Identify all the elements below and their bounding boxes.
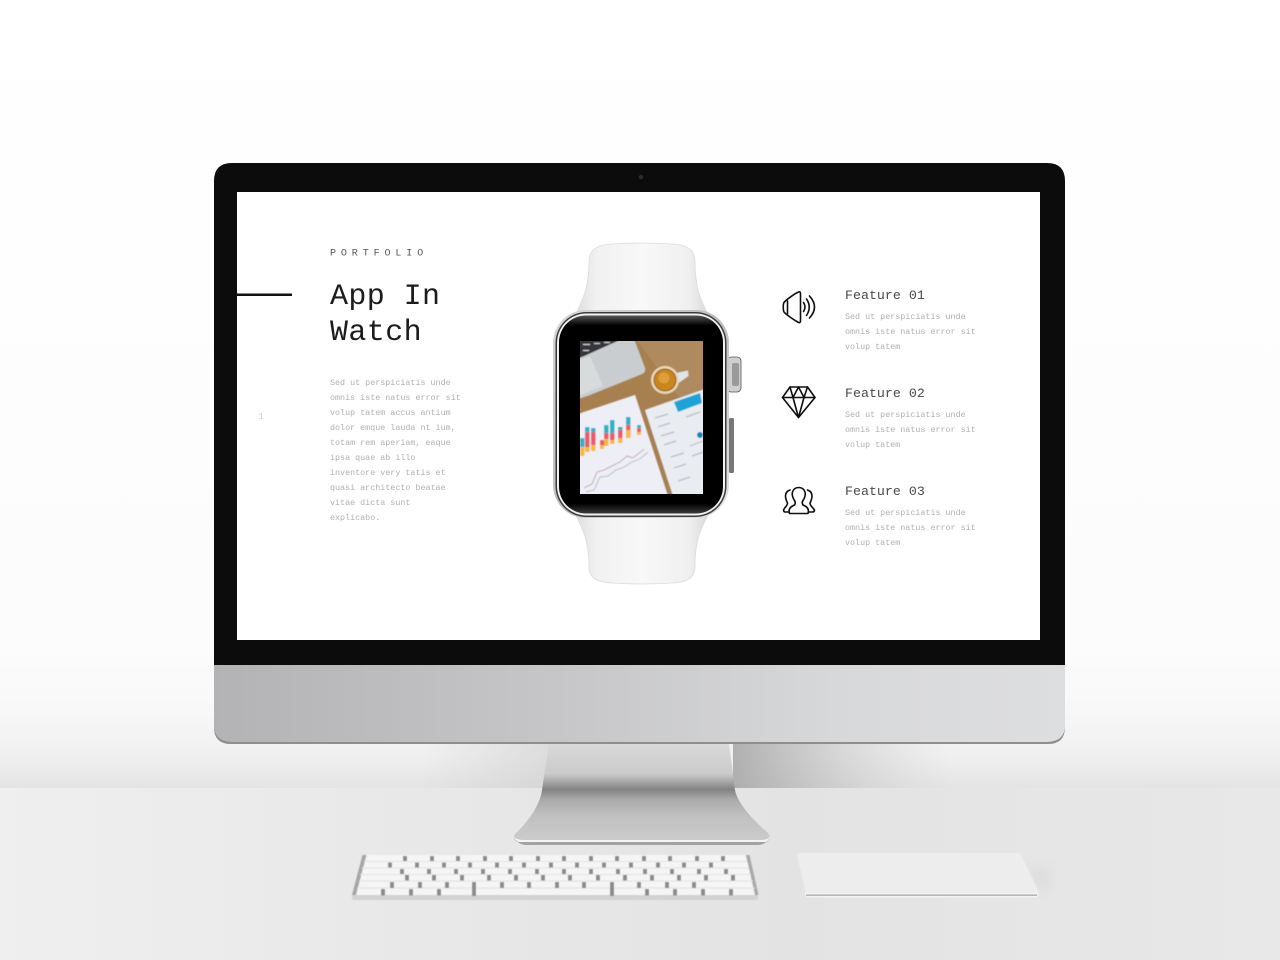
description: volup tatem <box>845 342 900 352</box>
monitor stand <box>514 744 770 845</box>
coffee <box>654 370 676 390</box>
saucer rim <box>651 366 679 394</box>
cup wall <box>654 368 676 392</box>
key field <box>354 855 757 895</box>
feature list <box>782 288 976 548</box>
desk surface <box>0 788 1280 960</box>
crown <box>727 357 741 392</box>
report lines <box>655 412 703 481</box>
eyebrow: PORTFOLIO <box>330 248 428 260</box>
key row lines <box>357 861 755 888</box>
heading: Feature 01 <box>845 288 925 303</box>
trackpad edge <box>805 892 1039 898</box>
body paragraph: dolor emque lauda nt ium, <box>330 423 456 433</box>
blue header <box>674 393 702 412</box>
crown knurl <box>732 363 739 386</box>
title: App In <box>330 280 440 314</box>
heading: Feature 02 <box>845 386 925 401</box>
coffee cup <box>651 366 688 394</box>
stand body <box>514 744 770 843</box>
steel case <box>553 310 729 518</box>
description: volup tatem <box>845 440 900 450</box>
case dark ring <box>556 312 726 517</box>
key gaps <box>381 856 735 896</box>
top band <box>574 243 710 318</box>
trackpad lower line <box>806 894 1037 896</box>
description <box>845 312 976 352</box>
body paragraph <box>330 378 461 523</box>
handle <box>676 370 688 384</box>
laptop keys <box>580 341 619 358</box>
camera <box>639 175 643 179</box>
description: Sed ut perspiciatis unde <box>845 508 966 518</box>
slide accent line <box>237 294 292 296</box>
stand foot highlight <box>514 836 770 843</box>
description: Sed ut perspiciatis unde <box>845 410 966 420</box>
body paragraph: quasi architecto beatae <box>330 483 446 493</box>
feature 03 <box>784 484 976 548</box>
slide number: 1 <box>258 412 264 422</box>
description: volup tatem <box>845 538 900 548</box>
line chart <box>584 449 644 488</box>
body paragraph: volup tatem accus antium <box>330 408 451 418</box>
trackpad <box>580 356 602 395</box>
feature 01 <box>783 288 976 352</box>
body paragraph: inventore very tatis et <box>330 468 446 478</box>
body paragraph: vitae dicta sunt <box>330 498 410 508</box>
trackpad surface <box>797 853 1038 893</box>
black face <box>559 316 723 514</box>
icon: diamond <box>782 387 815 418</box>
feature 02 <box>782 386 976 450</box>
chin bottom edge <box>214 727 1065 744</box>
black bezel <box>214 163 1065 665</box>
description: omnis iste natus error sit <box>845 327 976 337</box>
bar chart <box>580 417 641 456</box>
bottom band <box>574 512 710 584</box>
wood desk <box>578 339 705 496</box>
description: omnis iste natus error sit <box>845 425 976 435</box>
right report <box>645 389 705 496</box>
case highlight <box>557 314 725 516</box>
laptop <box>578 339 645 399</box>
slide screen <box>237 192 1040 640</box>
blue dot <box>697 432 703 438</box>
left edge <box>352 855 366 895</box>
monitor <box>214 163 1065 744</box>
description <box>845 410 976 450</box>
chart paper <box>578 395 668 496</box>
icon: speaker <box>783 292 814 323</box>
icon: people <box>784 488 814 514</box>
side button <box>729 418 734 473</box>
trackpad <box>797 853 1050 898</box>
description: Sed ut perspiciatis unde <box>845 312 966 322</box>
body paragraph: explicabo. <box>330 513 380 523</box>
left text column <box>258 248 461 523</box>
body paragraph: omnis iste natus error sit <box>330 393 461 403</box>
body paragraph: totam rem aperiam, eaque <box>330 438 451 448</box>
description: omnis iste natus error sit <box>845 523 976 533</box>
keyboard <box>352 855 758 900</box>
description <box>845 508 976 548</box>
apple watch <box>553 243 741 584</box>
monitor shadow on wall right <box>733 744 953 788</box>
keyboard lip <box>352 893 758 900</box>
title: Watch <box>330 316 422 350</box>
watch screen photo <box>578 339 705 496</box>
chin and body <box>214 660 1065 744</box>
stand foot edge <box>518 842 766 845</box>
trackpad side shadow <box>1026 866 1050 892</box>
body paragraph: ipsa quae ab illo <box>330 453 415 463</box>
right edge <box>746 855 758 895</box>
title <box>330 280 440 350</box>
body paragraph: Sed ut perspiciatis unde <box>330 378 451 388</box>
heading: Feature 03 <box>845 484 925 499</box>
monitor shadow on wall left <box>420 744 550 788</box>
